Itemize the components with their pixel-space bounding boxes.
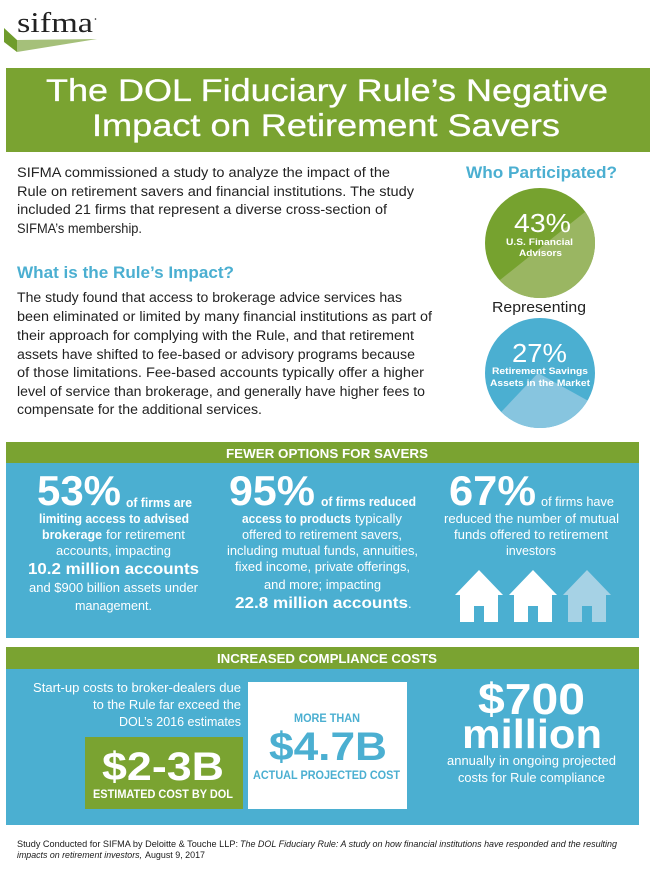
chart: 27% retirement savings assets: Retirement Savings xyxy=(492,366,588,376)
footnote: The DOL Fiduciary Rule: A study on how financial institutions have responded and the resulting xyxy=(240,839,618,850)
intro text block: SIFMA’s membership. xyxy=(17,221,142,236)
impact paragraph: been eliminated or limited by many financial institutions as part of xyxy=(17,309,432,324)
icon: house 1 xyxy=(455,570,503,622)
impact paragraph xyxy=(17,290,432,417)
heading: Who Participated?: Who Participated? xyxy=(466,164,617,182)
title banner: The DOL Fiduciary Rule’s Negative xyxy=(46,72,608,108)
stat: 95%: fixed income, private offerings, xyxy=(235,559,410,574)
start-up costs text xyxy=(33,680,241,729)
stat: 53%: brokerage xyxy=(42,527,102,542)
footnote: impacts on retirement investors, xyxy=(17,850,142,861)
impact paragraph: assets have shifted to fee-based or advisory programs because xyxy=(17,347,415,362)
panel: increased compliance costs xyxy=(6,647,639,825)
intro text block: Rule on retirement savers and financial institutions. The study xyxy=(17,184,414,199)
label: Representing: Representing xyxy=(492,299,586,316)
chart: 43% U.S. financial advisors: Advisors xyxy=(519,248,562,258)
stat: $700 million: $700 xyxy=(478,675,585,724)
start-up costs text: DOL’s 2016 estimates xyxy=(119,714,241,729)
stat: 53%: management. xyxy=(75,598,152,613)
stat: 95%: including mutual funds, annuities, xyxy=(227,543,418,558)
footnote xyxy=(17,839,618,861)
stat: 67%: investors xyxy=(506,543,556,558)
icon: house 3 (faded) xyxy=(563,570,611,622)
chart: 43% U.S. financial advisors: U.S. Financial xyxy=(506,237,573,247)
callout: actual projected cost: $4.7B xyxy=(269,725,387,769)
stat: 53%: limiting access to advised xyxy=(39,511,189,526)
impact paragraph: level of service than brokerage, and generally have higher fees to xyxy=(17,384,425,399)
footnote: Study Conducted for SIFMA by Deloitte & Touche LLP: xyxy=(17,839,238,850)
logo: sifma xyxy=(4,8,97,52)
stat: $700 million: million xyxy=(462,711,602,757)
chart: 27% retirement savings assets: Assets in the Market xyxy=(490,378,590,388)
intro text block xyxy=(17,165,414,236)
chart: 43% U.S. financial advisors xyxy=(485,188,595,298)
stat: 95%: and more; impacting xyxy=(264,577,381,592)
title banner xyxy=(6,68,650,152)
stat: $700 million xyxy=(447,675,616,785)
heading: What is the Rule's Impact?: What is the Rule’s Impact? xyxy=(17,264,234,282)
stat: 53%: accounts, impacting xyxy=(56,543,171,558)
callout: actual projected cost: ACTUAL PROJECTED COST xyxy=(253,770,400,782)
chart: 43% U.S. financial advisors: 43% xyxy=(514,208,571,238)
panel heading: FEWER OPTIONS FOR SAVERS xyxy=(226,447,428,461)
stat: 95%: offered to retirement savers, xyxy=(242,527,402,542)
stat: 53%: 10.2 million accounts xyxy=(28,561,199,578)
panel: fewer options for savers xyxy=(6,442,639,638)
stat: 53%: 53% xyxy=(37,467,121,514)
stat: $700 million: costs for Rule compliance xyxy=(458,770,605,785)
chart: 27% retirement savings assets xyxy=(485,318,595,428)
icon: house 2 xyxy=(509,570,557,622)
stat: 95%: access to products xyxy=(242,511,351,526)
callout: estimated cost by DOL xyxy=(85,737,243,809)
impact paragraph: The study found that access to brokerage advice services has xyxy=(17,290,402,305)
impact paragraph: of those limitations. Fee-based accounts typically offer a higher xyxy=(17,365,425,380)
callout: estimated cost by DOL: ESTIMATED COST BY DOL xyxy=(93,789,233,801)
intro text block: included 21 firms that represent a diverse cross-section of xyxy=(17,202,387,217)
panel heading: INCREASED COMPLIANCE COSTS xyxy=(217,652,437,666)
callout: actual projected cost xyxy=(248,682,407,809)
stat: 67% xyxy=(444,467,619,558)
stat: 67%: of firms have xyxy=(541,494,614,509)
stat: 53%: and $900 billion assets under xyxy=(29,580,199,595)
logo: sifma: sifma xyxy=(17,8,94,39)
stat: 67%: 67% xyxy=(449,467,536,514)
stat: 95%: 22.8 million accounts xyxy=(235,595,408,612)
callout: estimated cost by DOL: $2-3B xyxy=(102,745,224,789)
stat: 95%: 95% xyxy=(229,467,315,514)
impact paragraph: their approach for complying with the Rule, and that retirement xyxy=(17,328,414,343)
title banner: Impact on Retirement Savers xyxy=(92,107,560,143)
stat: 95% xyxy=(227,467,418,612)
stat: 95%: . xyxy=(408,596,412,611)
stat: $700 million: annually in ongoing projected xyxy=(447,753,616,768)
start-up costs text: to the Rule far exceed the xyxy=(93,697,241,712)
footnote: August 9, 2017 xyxy=(145,850,205,861)
stat: 67%: funds offered to retirement xyxy=(454,527,608,542)
stat: 67%: reduced the number of mutual xyxy=(444,511,619,526)
callout: actual projected cost: MORE THAN xyxy=(294,713,360,725)
stat: 95%: typically xyxy=(355,511,402,526)
stat: 53%: for retirement xyxy=(106,527,185,542)
chart: 27% retirement savings assets: 27% xyxy=(512,338,567,368)
stat: 95%: of firms reduced xyxy=(321,494,416,509)
stat: 53%: of firms are xyxy=(126,495,192,510)
start-up costs text: Start-up costs to broker-dealers due xyxy=(33,680,241,695)
impact paragraph: compensate for the additional services. xyxy=(17,402,262,417)
stat: 53% xyxy=(28,467,199,613)
intro text block: SIFMA commissioned a study to analyze the impact of the xyxy=(17,165,390,180)
